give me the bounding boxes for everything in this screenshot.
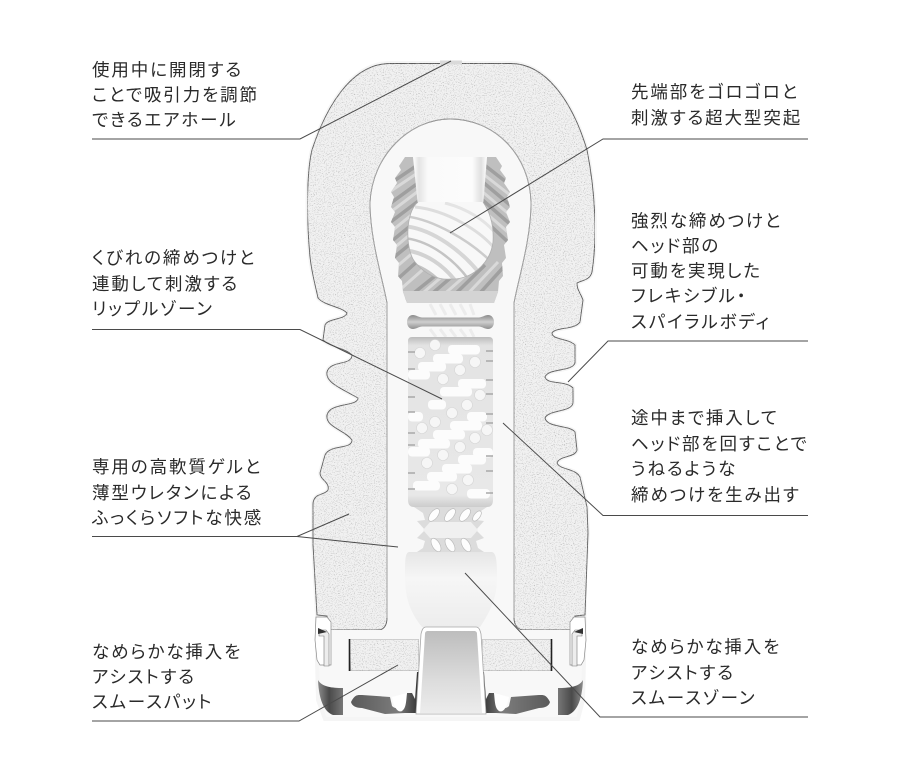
leader: smooth zone <box>465 573 808 717</box>
text blocks <box>91 60 809 712</box>
text: soft gel: ふっくらソフトな快感 <box>91 508 263 528</box>
spiral body texture <box>408 337 493 507</box>
product cross-section diagram <box>308 60 595 719</box>
base: outer dark crescent <box>318 680 343 715</box>
text: ripple zone: くびれの締めつけと <box>92 248 256 268</box>
text: head twist: 締めつけを生み出す <box>631 485 801 505</box>
top air hole <box>440 60 462 64</box>
base assembly, left side <box>315 617 418 715</box>
text: ripple zone: リップルゾーン <box>92 299 214 319</box>
leader: soft gel <box>92 514 398 547</box>
outer body halo <box>308 63 595 719</box>
texture: edge ticks <box>408 351 493 493</box>
text: flexible body: スパイラルボディ <box>631 312 771 332</box>
central tube <box>416 627 486 714</box>
text: flexible body: 可動を実現した <box>631 261 762 281</box>
smooth pad, left <box>350 640 419 671</box>
text: flexible body: 強烈な締めつけと <box>631 211 782 231</box>
text: head twist: ヘッド部を回すことで <box>631 434 809 454</box>
head: ribbed cavity <box>388 155 513 305</box>
leader: flexible body <box>568 341 808 382</box>
text: air hole: 使用中に開閉する <box>92 60 243 80</box>
texture: round bumps <box>414 340 492 494</box>
text: head twist: 途中まで挿入して <box>631 408 779 428</box>
leader: smooth pad <box>92 665 398 721</box>
text: soft gel: 薄型ウレタンによる <box>92 483 253 503</box>
text: smooth pad: スムースパット <box>92 692 213 712</box>
text: smooth zone: なめらかな挿入を <box>631 637 781 657</box>
text: head protrusion: 先端部をゴロゴロと <box>631 82 799 102</box>
texture: white bars <box>408 345 493 498</box>
smooth pad, right <box>482 640 552 671</box>
inner cavity edge <box>370 119 531 618</box>
base: clip connector <box>315 617 331 665</box>
leader: air hole <box>92 61 451 139</box>
text: smooth zone: アシストする <box>631 663 735 683</box>
ripple zone: faint ribs <box>430 304 474 337</box>
head: shaft <box>413 157 487 207</box>
text: smooth zone: スムースゾーン <box>631 688 756 708</box>
text: flexible body: ヘッド部の <box>631 236 720 256</box>
text: smooth pad: アシストする <box>92 667 196 687</box>
text: smooth pad: なめらかな挿入を <box>92 642 242 662</box>
foam body <box>308 63 595 630</box>
lower twist section <box>414 507 487 553</box>
text: head protrusion: 刺激する超大型突起 <box>631 108 802 128</box>
head: oversized swirl tip <box>408 202 493 279</box>
smooth zone bulb <box>405 552 497 627</box>
text: soft gel: 専用の高軟質ゲルと <box>92 457 262 477</box>
leader: head twist <box>503 423 808 516</box>
ripple zone: dumbbell ring <box>407 315 494 329</box>
pad dark edges <box>350 639 552 671</box>
base assembly, right side <box>482 617 586 715</box>
text: flexible body: フレキシブル・ <box>631 286 747 306</box>
leader lines <box>92 61 808 721</box>
head: ball outline <box>408 202 493 279</box>
leader: ripple zone <box>92 330 442 399</box>
text: ripple zone: 連動して刺激する <box>92 274 239 294</box>
text: air hole: ことで吸引力を調節 <box>92 85 259 105</box>
base: inner dark cap <box>351 672 418 714</box>
leader: head protrusion <box>450 139 808 233</box>
text: head twist: うねるような <box>631 459 737 479</box>
text: air hole: できるエアホール <box>92 110 238 130</box>
